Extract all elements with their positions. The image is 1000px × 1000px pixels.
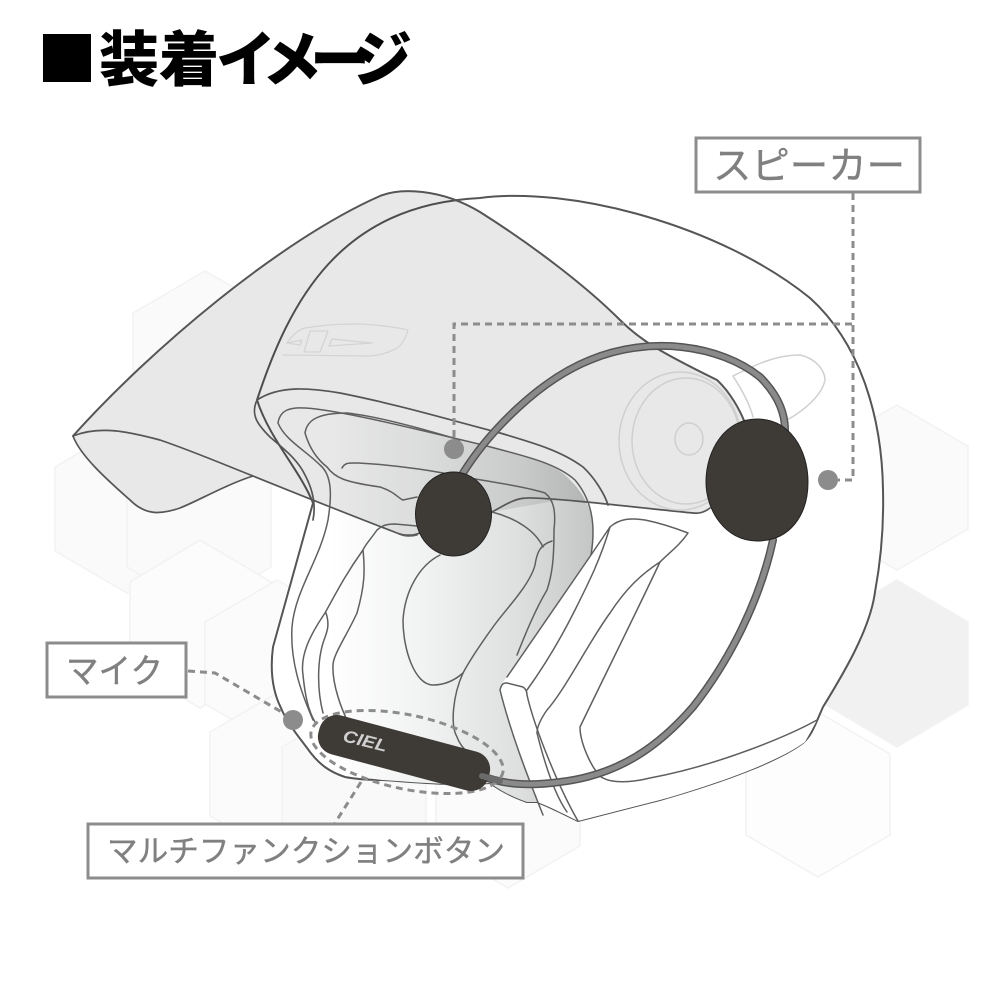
cable end	[482, 776, 500, 781]
label: multi-function button	[88, 824, 523, 878]
callout dashes	[188, 193, 853, 823]
interior gradient lining	[278, 408, 593, 802]
multi-function button unit	[314, 711, 494, 795]
helmet interior lines	[278, 408, 593, 755]
callout dots	[283, 439, 838, 730]
label: mic	[47, 643, 186, 697]
label: multi-function button: マルチファンクションボタン	[107, 834, 505, 869]
visor backing	[73, 191, 480, 533]
cheek pad lines	[500, 519, 817, 821]
label: speaker: スピーカー	[713, 146, 905, 188]
left speaker pad	[416, 472, 492, 556]
speaker cable	[463, 346, 785, 784]
right speaker pad	[706, 419, 808, 541]
cheek pad right	[500, 519, 817, 821]
rear speaker disc outline	[619, 355, 825, 510]
helmet	[73, 191, 883, 821]
label: speaker	[696, 138, 920, 192]
helmet shell	[257, 196, 883, 821]
title: ■装着イメージ	[37, 12, 412, 99]
visor outlines	[73, 191, 745, 535]
background hexagons	[55, 271, 968, 888]
visor	[73, 191, 750, 535]
CIEL logo: CIEL	[341, 726, 389, 756]
label: mic: マイク	[66, 653, 163, 691]
visor emblem	[283, 324, 408, 356]
